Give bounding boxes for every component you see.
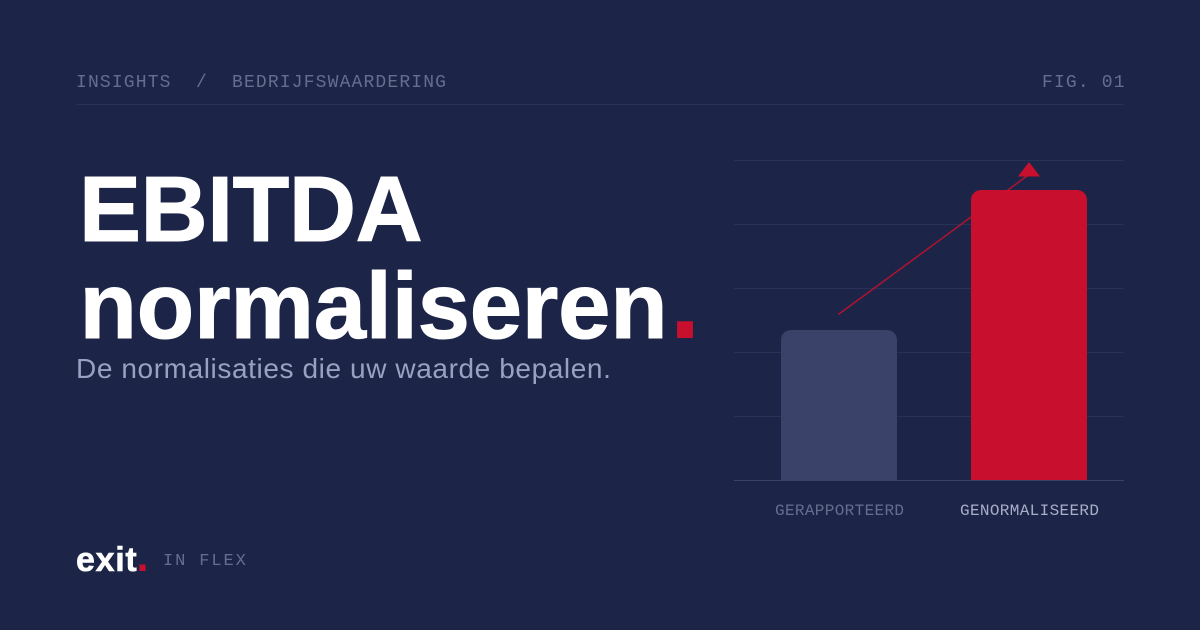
breadcrumb header: /	[196, 73, 208, 93]
trend arrow	[838, 162, 1040, 314]
title	[79, 157, 700, 362]
bar: genormaliseerd	[971, 190, 1087, 480]
breadcrumb header: BEDRIJFSWAARDERING	[232, 73, 447, 93]
logo: exit in flex	[76, 532, 248, 581]
tagline: IN FLEX	[163, 552, 248, 571]
bar: gerapporteerd	[781, 330, 897, 480]
breadcrumb header: INSIGHTS	[76, 73, 172, 93]
title line 2: normaliseren.	[80, 237, 700, 362]
label: gerapporteerd: GERAPPORTEERD	[775, 502, 904, 520]
wordmark: exit.	[76, 532, 149, 581]
figure number: FIG. 01	[1042, 73, 1126, 93]
label: genormaliseerd: GENORMALISEERD	[960, 502, 1099, 520]
breadcrumb header	[76, 73, 447, 93]
title line 1: EBITDA	[79, 157, 422, 261]
subtitle: De normalisaties die uw waarde bepalen.	[76, 352, 611, 384]
